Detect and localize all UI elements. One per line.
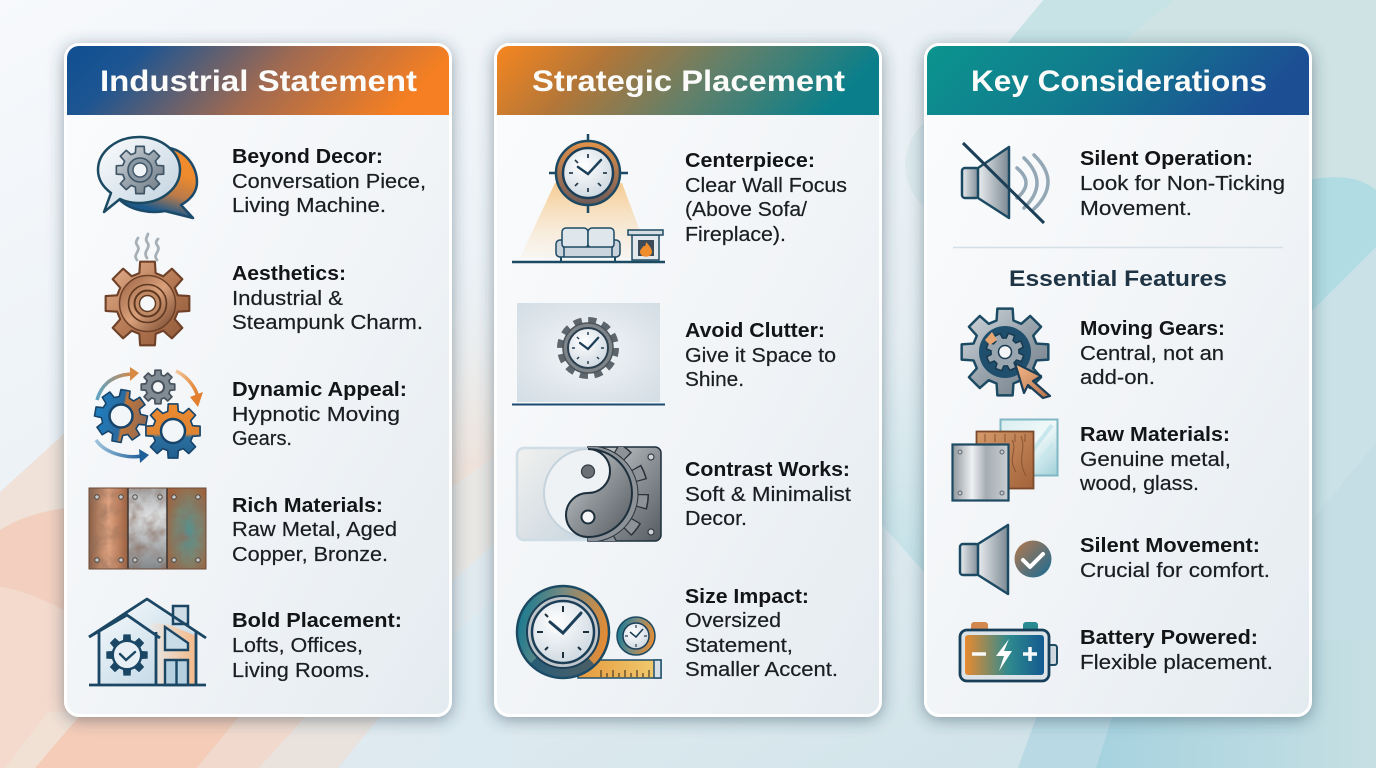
icon: raw materials stack (952, 420, 1058, 500)
icon: house with clock gear (89, 599, 206, 685)
text: avoid clutter (685, 320, 836, 391)
text: beyond decor: Living Machine. (232, 195, 386, 217)
text: dynamic appeal: Gears. (232, 428, 292, 450)
text: contrast works (685, 459, 851, 530)
text: size impact: Statement, (685, 635, 793, 657)
icon: yin yang contrast (517, 442, 661, 546)
text: raw materials: Raw Materials: (1080, 424, 1230, 446)
text: size impact: Smaller Accent. (685, 659, 838, 681)
text: aesthetics: Steampunk Charm. (232, 312, 423, 334)
icon: speaker with check (960, 525, 1052, 594)
text: bold placement: Bold Placement: (232, 610, 402, 632)
icon: speech bubbles with gear (98, 137, 197, 218)
text: rich materials: Rich Materials: (232, 495, 383, 517)
text: raw materials: Genuine metal, (1080, 449, 1231, 471)
text: silent movement (1080, 535, 1270, 582)
icon: muted speaker (962, 143, 1048, 223)
text: silent operation: Look for Non-Ticking (1080, 173, 1285, 195)
header bar: strategic placement (497, 46, 879, 115)
text: rich materials: Raw Metal, Aged (232, 519, 397, 541)
text: size impact: Oversized (685, 610, 781, 632)
text: rich materials (232, 495, 397, 566)
text: centerpiece: (Above Sofa/ (685, 199, 807, 221)
text: beyond decor: Conversation Piece, (232, 171, 426, 193)
header bar: industrial statement (67, 46, 449, 115)
text: moving gears: add-on. (1080, 367, 1155, 389)
text: battery powered (1080, 627, 1273, 674)
text: raw materials (1079, 424, 1231, 495)
text: silent operation: Silent Operation: (1080, 148, 1253, 170)
icon: moving gears with cursor (962, 309, 1050, 398)
text: avoid clutter: Give it Space to (685, 345, 836, 367)
text: silent movement: Silent Movement: (1080, 535, 1260, 557)
text: bold placement: Living Rooms. (232, 660, 370, 682)
text: moving gears (1080, 318, 1225, 389)
text: centerpiece: Fireplace). (685, 224, 786, 246)
text: beyond decor (232, 146, 426, 217)
icon: steam and copper gear (106, 234, 189, 345)
icon: big and small clocks with tape measure (517, 586, 661, 678)
text: moving gears: Moving Gears: (1080, 318, 1225, 340)
text: contrast works: Contrast Works: (685, 459, 850, 481)
text: silent operation (1080, 148, 1285, 220)
header bar: key considerations (927, 46, 1309, 115)
text: dynamic appeal (232, 379, 407, 450)
icon: battery (960, 622, 1057, 681)
icon: moving gears with arrows (91, 367, 203, 463)
heading: industrial statement: Industrial Statement (100, 65, 417, 98)
text: beyond decor: Beyond Decor: (232, 146, 383, 168)
icon: gear clock on empty wall (512, 303, 665, 404)
text: centerpiece: Clear Wall Focus (685, 175, 847, 197)
text: size impact (685, 586, 838, 681)
text: moving gears: Central, not an (1080, 343, 1224, 365)
heading: strategic placement: Strategic Placement (532, 65, 845, 98)
text: aesthetics: Aesthetics: (232, 263, 346, 285)
text: centerpiece (685, 150, 847, 246)
text: battery powered: Battery Powered: (1080, 627, 1258, 649)
text: dynamic appeal: Dynamic Appeal: (232, 379, 407, 401)
subheading: essential features: Essential Features (1009, 266, 1227, 291)
text: rich materials: Copper, Bronze. (232, 544, 388, 566)
text: avoid clutter: Shine. (685, 369, 744, 391)
text: contrast works: Soft & Minimalist (685, 484, 851, 506)
icon: metal panels (89, 488, 206, 569)
text: bold placement: Lofts, Offices, (232, 635, 363, 657)
text: size impact: Size Impact: (685, 586, 809, 608)
text: dynamic appeal: Hypnotic Moving (232, 404, 400, 426)
text: aesthetics (232, 263, 423, 334)
text: silent movement: Crucial for comfort. (1080, 560, 1270, 582)
text: bold placement (232, 610, 402, 682)
text: contrast works: Decor. (685, 508, 747, 530)
text: aesthetics: Industrial & (232, 288, 344, 310)
text: silent operation: Movement. (1080, 198, 1192, 220)
text: raw materials: wood, glass. (1079, 473, 1199, 495)
panel: industrial statement (66, 44, 450, 716)
text: battery powered: Flexible placement. (1080, 652, 1273, 674)
text: centerpiece: Centerpiece: (685, 150, 815, 172)
icon: clock above sofa and fireplace (512, 134, 665, 262)
text: avoid clutter: Avoid Clutter: (685, 320, 825, 342)
heading: key considerations: Key Considerations (971, 65, 1267, 98)
panel: strategic placement (496, 44, 880, 716)
panel: key considerations (926, 44, 1310, 716)
